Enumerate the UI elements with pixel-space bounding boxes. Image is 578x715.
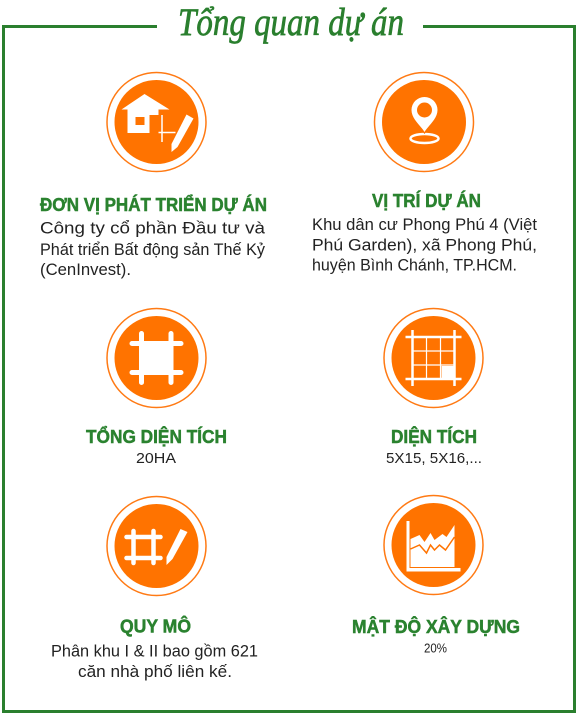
icon: house and pencil <box>107 72 206 172</box>
heading: TỔNG DIỆN TÍCH <box>86 426 227 447</box>
panel: lot size <box>384 308 483 467</box>
description: Phát triển Bất động sản Thế Kỷ <box>40 241 266 259</box>
title: Tổng quan dự án <box>178 1 404 44</box>
icon: hash plan and pencil <box>107 496 206 596</box>
description <box>51 642 258 681</box>
heading: MẬT ĐỘ XÂY DỰNG <box>352 616 520 637</box>
description: Phân khu I & II bao gồm 621 <box>51 642 258 660</box>
heading: DIỆN TÍCH <box>391 426 477 447</box>
icon: area chart <box>384 496 483 594</box>
panel: total area <box>86 308 227 467</box>
heading: QUY MÔ <box>120 616 191 636</box>
description: căn nhà phố liên kế. <box>78 663 232 681</box>
description: Công ty cổ phần Đầu tư và <box>40 220 266 238</box>
icon: plot square <box>107 308 206 408</box>
description: 20% <box>424 640 447 656</box>
panel: developer <box>40 72 267 279</box>
heading: VỊ TRÍ DỰ ÁN <box>372 190 481 211</box>
icon: map pin <box>374 72 474 172</box>
description: 5X15, 5X16,... <box>386 451 482 467</box>
panel: scale <box>51 496 258 681</box>
description: Khu dân cư Phong Phú 4 (Việt <box>312 216 537 234</box>
description <box>40 220 266 279</box>
panel: density <box>352 496 520 656</box>
icon: lot grid <box>384 308 483 408</box>
description: Phú Garden), xã Phong Phú, <box>312 236 537 254</box>
description: (CenInvest). <box>40 261 131 279</box>
description <box>312 216 537 274</box>
description: huyện Bình Chánh, TP.HCM. <box>312 256 517 274</box>
heading: ĐƠN VỊ PHÁT TRIỂN DỰ ÁN <box>40 194 267 215</box>
description: 20HA <box>136 451 176 467</box>
panel: location <box>312 72 537 274</box>
